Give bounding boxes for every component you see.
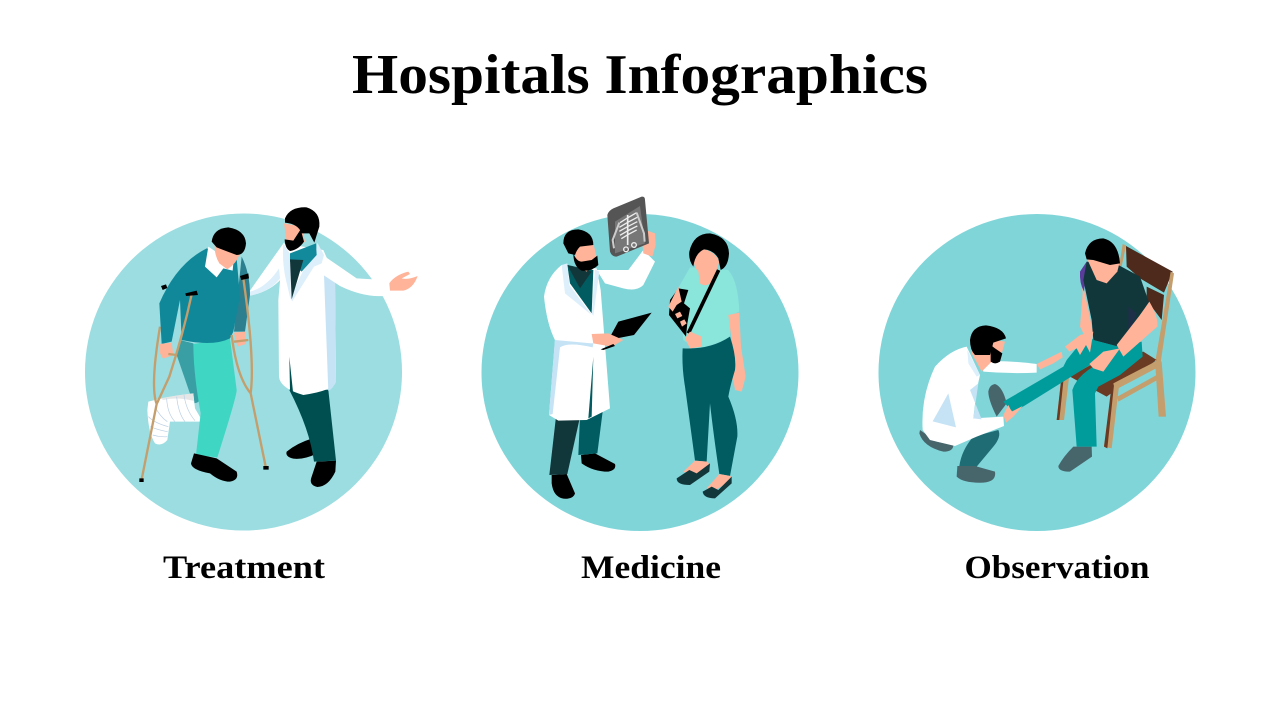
panel: medicine — [482, 197, 798, 531]
illustration: doctor examining seated patient's leg — [919, 238, 1174, 483]
label: Treatment: Treatment — [163, 550, 325, 586]
label: Medicine: Medicine — [581, 550, 721, 586]
label: Observation: Observation — [964, 550, 1150, 586]
observation circle — [878, 214, 1196, 531]
panel: observation — [878, 214, 1196, 531]
panel: treatment — [85, 207, 418, 530]
illustration: doctor helping patient on crutches — [139, 207, 418, 487]
illustration: doctor with x-ray and patient with sling — [544, 197, 746, 499]
medicine circle — [482, 214, 798, 531]
title: Hospitals Infographics — [352, 44, 928, 106]
treatment circle — [85, 214, 402, 530]
